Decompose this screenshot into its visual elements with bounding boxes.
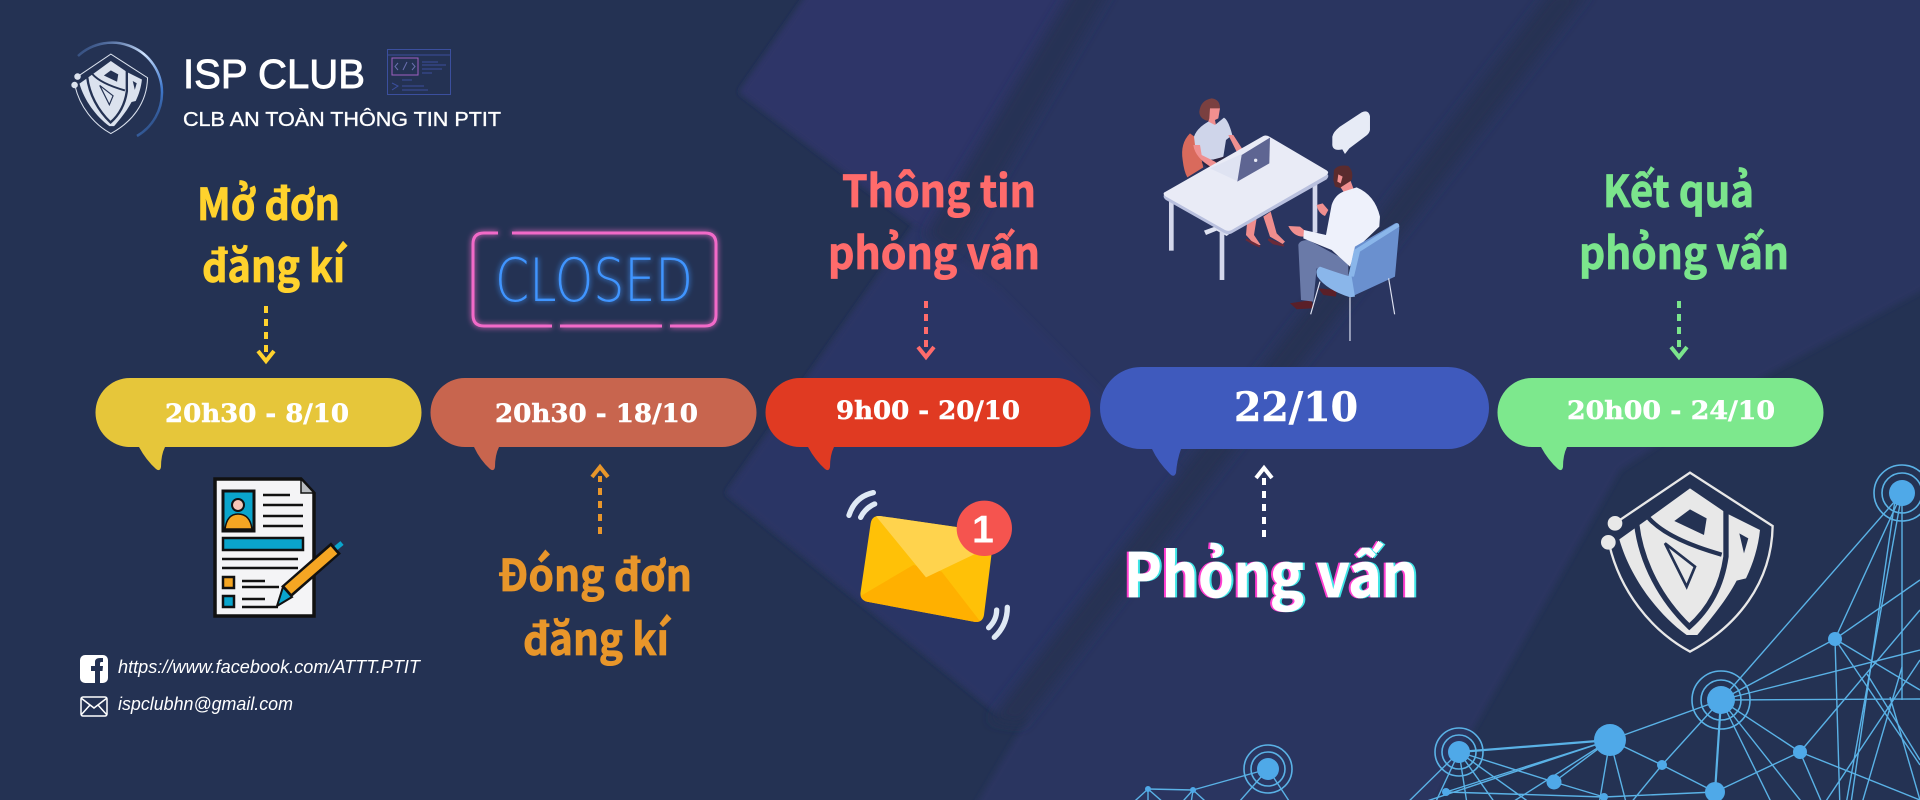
step 4 date pill: 22/10 — [1234, 384, 1358, 431]
step 5 heading: Kết quả — [1603, 156, 1754, 220]
step 4 interview illustration — [1164, 98, 1399, 341]
email link: ispclubhn@gmail.com — [118, 694, 293, 714]
step 4 date pill — [1100, 367, 1489, 476]
icon: mail notification: 1 — [972, 508, 994, 552]
step 3 heading: phỏng vấn — [828, 218, 1040, 282]
step 2 date pill — [430, 378, 756, 470]
arrow: step 1 — [258, 306, 274, 361]
step 1 date pill: 20h30 - 8/10 — [165, 399, 349, 428]
woman chair — [1182, 133, 1203, 177]
step 2 date pill: 20h30 - 18/10 — [495, 399, 698, 428]
speech bubble — [1332, 111, 1370, 154]
step 1 date pill — [96, 378, 422, 470]
woman — [1193, 98, 1285, 247]
arrow: step 4 — [1256, 468, 1272, 537]
network decoration — [1125, 465, 1920, 800]
step 4 heading: Phỏng vấn — [1122, 526, 1416, 615]
step 2 heading — [498, 540, 692, 668]
step 3 date pill: 9h00 - 20/10 — [836, 396, 1020, 425]
arrow: step 3 — [918, 301, 934, 357]
step 2 heading: đăng kí — [523, 604, 671, 668]
step 4 heading: Phỏng vấn — [1124, 526, 1418, 615]
arrow: step 2 — [592, 467, 608, 534]
icon: cv document with pen — [215, 479, 342, 616]
facebook link — [80, 655, 422, 683]
step 2 heading: Đóng đơn — [498, 540, 692, 604]
icon: code window — [387, 50, 451, 94]
step 3 heading — [828, 156, 1040, 282]
step 2 neon closed sign: CLOSED — [495, 246, 693, 316]
man chair — [1311, 223, 1399, 341]
step 5 heading: phỏng vấn — [1579, 218, 1789, 282]
table — [1164, 136, 1328, 280]
step 5 heading — [1579, 156, 1789, 282]
facebook link: https://www.facebook.com/ATTT.PTIT — [118, 657, 422, 677]
man — [1288, 165, 1380, 309]
club title: ISP CLUB — [183, 51, 365, 97]
header logo — [71, 43, 162, 136]
step 1 heading — [197, 169, 347, 295]
step 1 heading: đăng kí — [202, 231, 347, 295]
step 5 date pill: 20h00 - 24/10 — [1567, 396, 1775, 425]
step 2 neon closed sign — [473, 233, 716, 326]
icon: mail notification — [849, 493, 1012, 637]
club subtitle: CLB AN TOÀN THÔNG TIN PTIT — [183, 108, 501, 131]
step 3 date pill — [766, 378, 1090, 470]
step 5 date pill — [1498, 378, 1824, 470]
isp shield logo — [1601, 473, 1773, 652]
laptop — [1210, 138, 1270, 182]
step 4 heading: Phỏng vấn — [1126, 526, 1420, 615]
step 1 heading: Mở đơn — [197, 169, 340, 233]
arrow: step 5 — [1671, 301, 1687, 357]
step 3 heading: Thông tin — [842, 156, 1036, 220]
